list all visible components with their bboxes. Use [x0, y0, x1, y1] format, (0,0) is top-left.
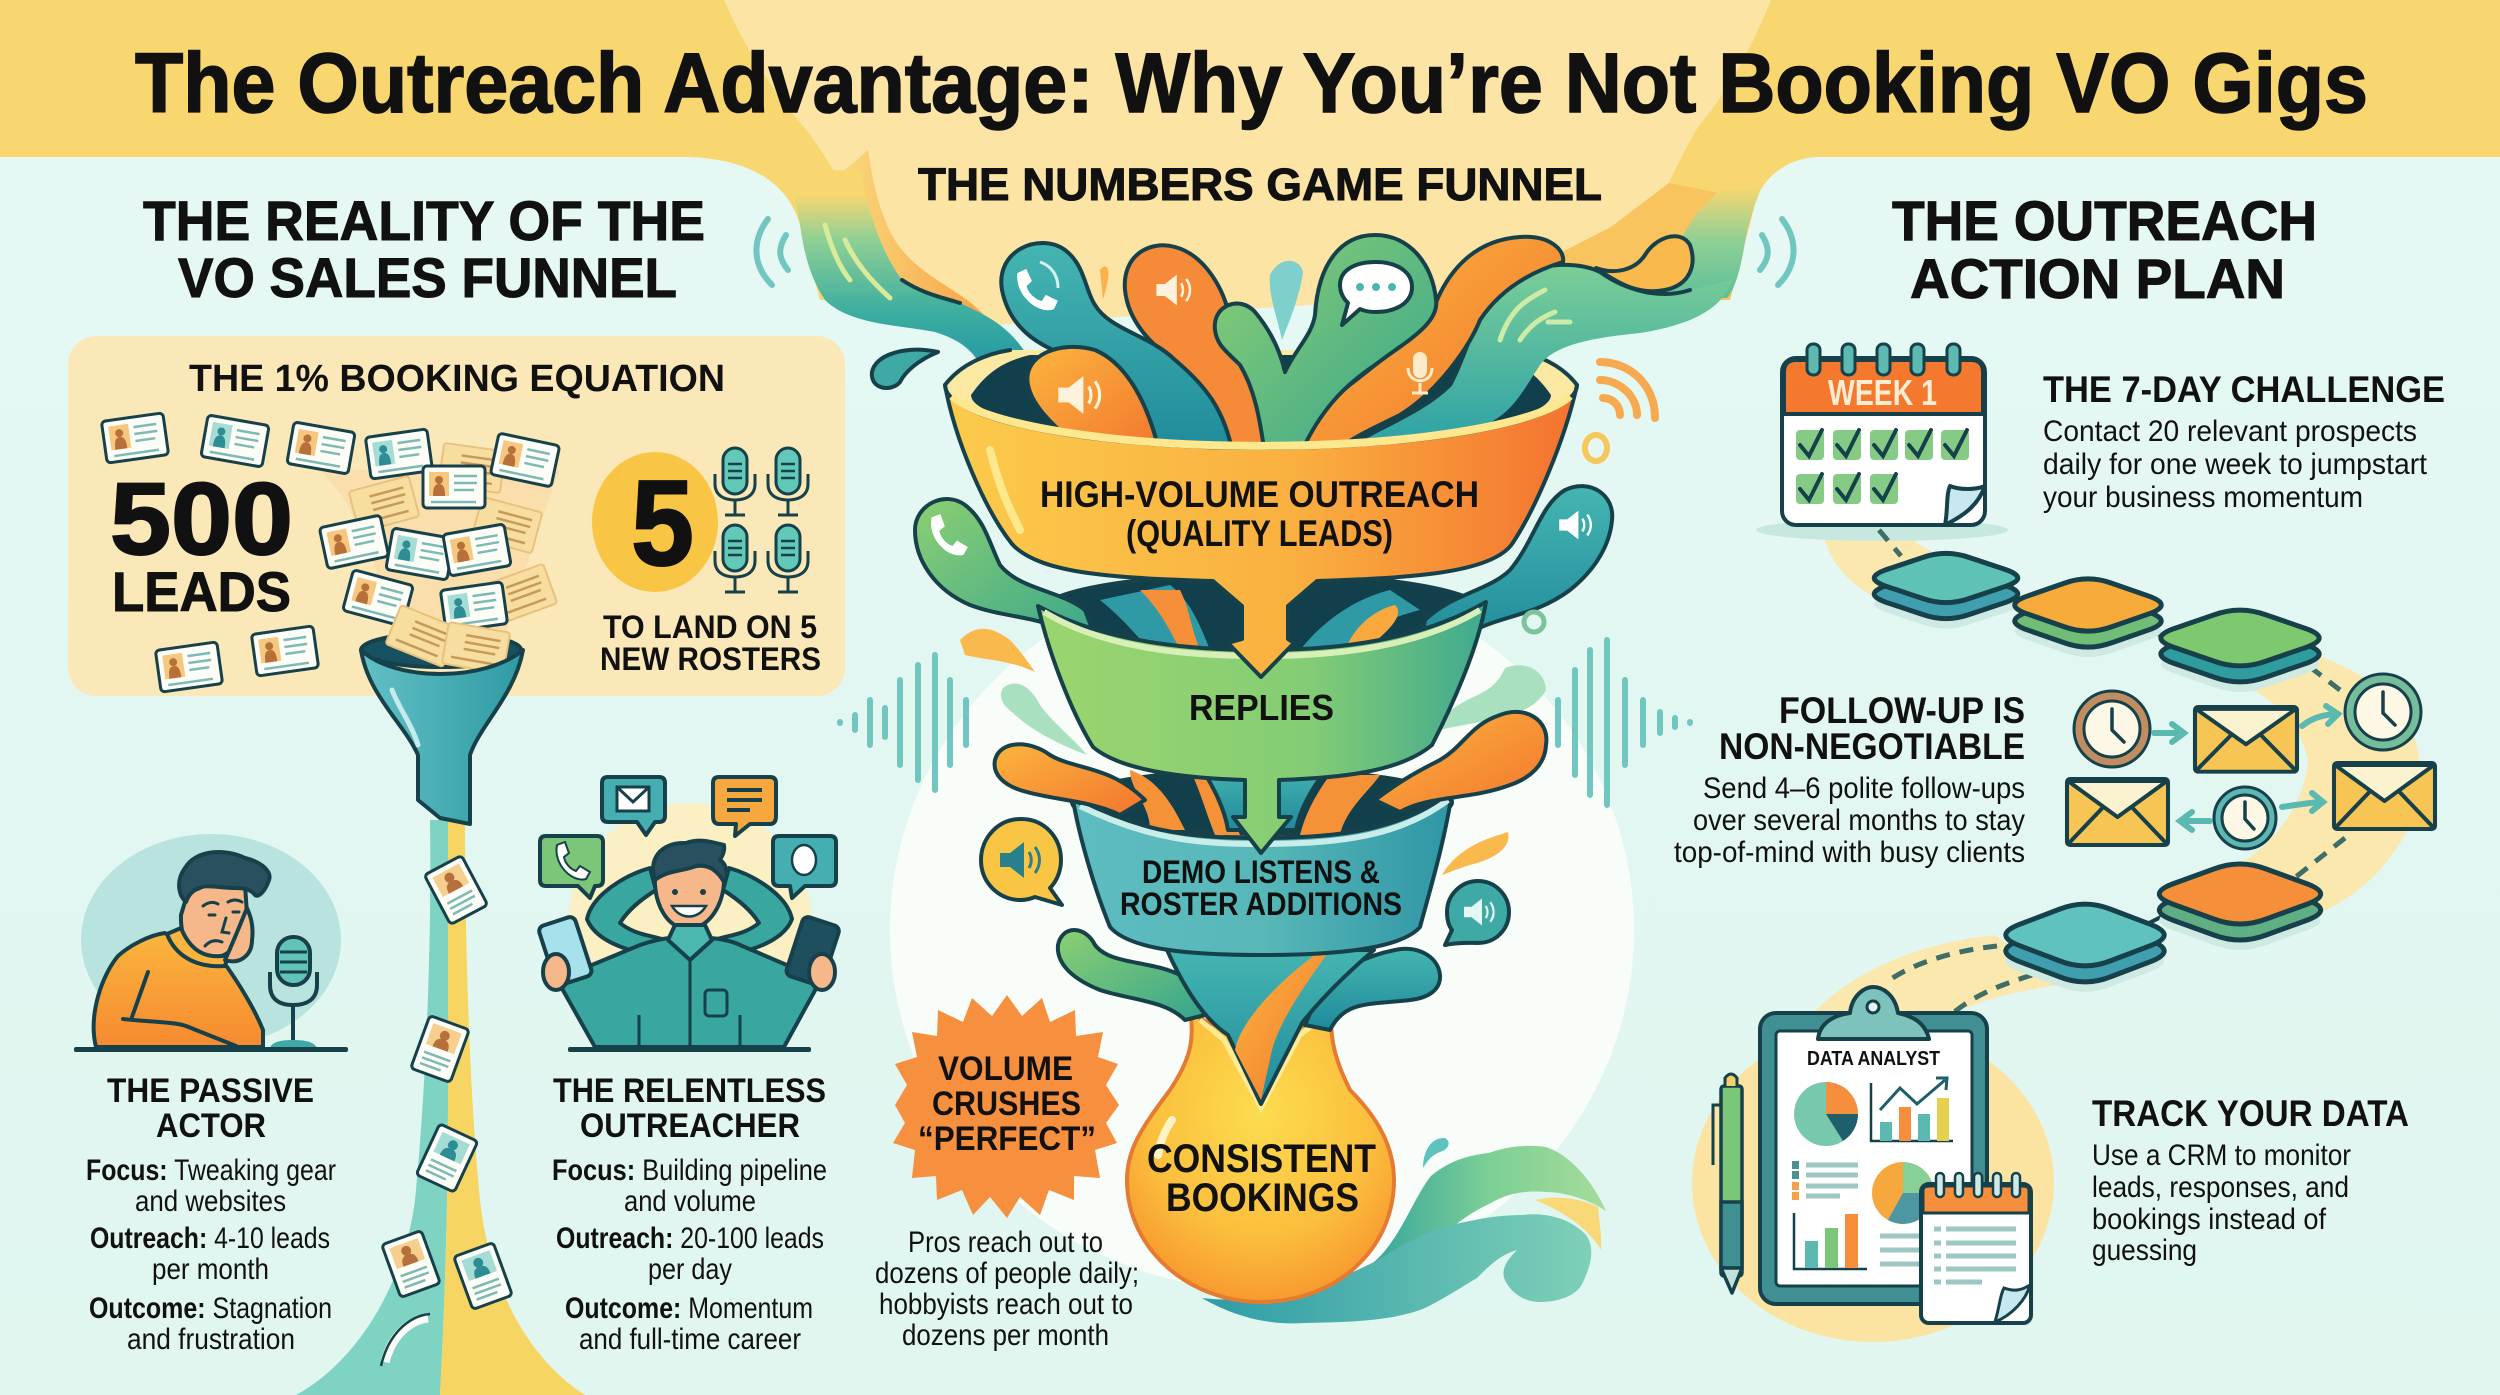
stat: 500 leads: LEADS: [112, 560, 291, 623]
cream pour area at top of funnel: [724, 0, 1771, 325]
text: follow-up is non-negotiable: Send 4–6 polite follow-ups: [1703, 772, 2025, 805]
label: high-volume outreach: [1040, 474, 1479, 554]
text: track your data: [2092, 1093, 2409, 1267]
heading: the outreach action plan: ACTION PLAN: [1910, 247, 2285, 310]
label: demo listens and roster additions: DEMO LISTENS &: [1142, 854, 1380, 890]
persona details: [86, 1154, 336, 1356]
stat: 5 with microphones: 5: [631, 455, 694, 591]
text: the 7-day challenge: daily for one week to jumpstart: [2043, 448, 2428, 481]
bar chart: [1794, 1213, 1920, 1269]
persona details: per day: [648, 1253, 732, 1286]
text: track your data: leads, responses, and: [2092, 1171, 2349, 1204]
heading: numbers game funnel: THE NUMBERS GAME FUNNEL: [918, 159, 1602, 210]
bar and line chart: [1871, 1078, 1953, 1141]
decoration: bubble left speaker: [981, 819, 1062, 905]
phones in hands: [538, 916, 840, 990]
burst label: “PERFECT”: [918, 1120, 1096, 1158]
stat: 500 leads: [110, 462, 293, 623]
green-teal wave on right: [1335, 265, 1732, 455]
persona details: and volume: [624, 1185, 756, 1218]
persona name: [553, 1072, 826, 1145]
decoration: top droplets: [872, 261, 1303, 388]
decoration: bubble right speaker: [1445, 881, 1509, 945]
follow-up clocks and envelopes: [2067, 674, 2435, 849]
persona: the passive actor: [74, 834, 348, 1356]
small teal funnel: [361, 605, 523, 824]
left column: reality of the funnel: [68, 189, 845, 1395]
splash: orange right stream with mic: [1298, 237, 1563, 455]
equation heading: THE 1% BOOKING EQUATION: [189, 358, 725, 400]
text: track your data: Use a CRM to monitor: [2092, 1139, 2351, 1172]
bottom swirl under bulb: [1202, 1138, 1606, 1323]
persona details: Outreach: 4-10 leads: [90, 1222, 330, 1255]
text: track your data: TRACK YOUR DATA: [2092, 1093, 2409, 1134]
heading: the outreach action plan: THE OUTREACH: [1892, 189, 2317, 252]
sound waves beside the funnel: [756, 219, 1794, 805]
persona details: [552, 1154, 827, 1356]
persona details: Outcome: Stagnation: [89, 1292, 332, 1325]
text: the 7-day challenge: [2043, 369, 2445, 514]
burst label: CRUSHES: [932, 1085, 1081, 1123]
text: the 7-day challenge: THE 7-DAY CHALLENGE: [2043, 369, 2445, 410]
persona details: and websites: [135, 1185, 286, 1218]
persona details: and full-time career: [579, 1323, 801, 1356]
persona name: THE RELENTLESS: [553, 1072, 826, 1110]
text: follow-up is non-negotiable: FOLLOW-UP IS: [1779, 690, 2025, 731]
caption: to land on 5 new rosters: [600, 609, 821, 677]
caption: to land on 5 new rosters: NEW ROSTERS: [600, 641, 821, 677]
persona name: OUTREACHER: [580, 1107, 800, 1145]
text: pros versus hobbyists: Pros reach out to: [908, 1226, 1103, 1259]
pie chart 2: [1872, 1162, 1934, 1224]
text: follow-up is non-negotiable: over several months to stay: [1693, 804, 2025, 837]
microphone icon: [270, 937, 317, 1048]
text: track your data: guessing: [2092, 1234, 2197, 1267]
stat: 5 with microphones: [592, 448, 808, 592]
splash: top right yellow blob: [1596, 236, 1693, 291]
pie chart 1: [1794, 1082, 1858, 1146]
illustration: tired actor at microphone: [74, 834, 348, 1052]
persona details: and frustration: [127, 1323, 295, 1356]
text: pros versus hobbyists: dozens per month: [902, 1319, 1109, 1352]
label: demo listens and roster additions: ROSTER ADDITIONS: [1120, 886, 1402, 922]
persona name: THE PASSIVE: [107, 1072, 314, 1110]
persona name: ACTOR: [156, 1107, 266, 1145]
right column: action plan: [1674, 189, 2445, 1342]
funnel stage 3: demo listens and roster additions: [1072, 770, 1452, 955]
persona details: per month: [152, 1253, 269, 1286]
splashes between funnel stages: [995, 712, 1546, 830]
splash with speaker icon: [1420, 486, 1612, 650]
label: replies: REPLIES: [1189, 687, 1334, 728]
text: pros versus hobbyists: dozens of people daily;: [875, 1257, 1139, 1290]
funnel stage 2: replies: [915, 486, 1612, 853]
top banner band: [0, 0, 2500, 300]
beam behind lead cards: [320, 470, 560, 650]
central white glow: [890, 570, 1634, 1290]
calendar icon: week 1: [1756, 344, 2008, 541]
heading: reality of the VO sales funnel: THE REALITY OF THE: [143, 189, 705, 252]
lead cards cloud: [101, 413, 560, 692]
clipboard: data analyst: DATA ANALYST: [1807, 1048, 1940, 1070]
bulb label: BOOKINGS: [1166, 1176, 1359, 1220]
text: follow-up is non-negotiable: [1674, 690, 2025, 869]
bulb label: CONSISTENT: [1147, 1137, 1376, 1181]
left side flow: orange and green: [790, 150, 1045, 420]
decoration: small splashes: [960, 612, 1544, 875]
text: pros versus hobbyists: hobbyists reach out to: [879, 1288, 1133, 1321]
stat: 500 leads: 500: [110, 462, 293, 576]
clipboard: data analyst: [1760, 987, 2031, 1323]
text: follow-up is non-negotiable: NON-NEGOTIABLE: [1719, 726, 2025, 767]
funnel stage 1: high-volume outreach: [945, 235, 1732, 677]
heading: reality of the VO sales funnel: VO SALES FUNNEL: [178, 246, 677, 309]
decoration: orange wifi arcs: [1585, 362, 1655, 461]
splash with phone icon: [1001, 243, 1233, 455]
splash with phone icon: [915, 499, 1100, 650]
heading: reality of the VO sales funnel: [143, 189, 705, 309]
persona details: Outcome: Momentum: [565, 1292, 813, 1325]
main title: The Outreach Advantage: Why You’re Not Booking VO Gigs: [135, 36, 2368, 130]
stream of leads falling from funnel: [296, 820, 585, 1395]
panel: 1% booking equation: [68, 336, 845, 696]
caption: to land on 5 new rosters: TO LAND ON 5: [603, 609, 817, 645]
light green splashes in the glow: [1001, 665, 1546, 755]
pen icon: [1713, 1074, 1742, 1293]
burst label: VOLUME: [938, 1050, 1073, 1088]
persona: the relentless outreacher: [538, 777, 840, 1356]
label: high-volume outreach: (QUALITY LEADS): [1126, 513, 1393, 554]
notepad: [1921, 1173, 2031, 1323]
splash with speaker icon, orange: [1125, 245, 1265, 455]
persona details: Focus: Building pipeline: [552, 1154, 827, 1187]
text: the 7-day challenge: Contact 20 relevant prospects: [2043, 415, 2417, 448]
splash with chat bubble: [1215, 235, 1436, 455]
right side flow: yellow and green: [1560, 157, 1780, 300]
text: the 7-day challenge: your business momentum: [2043, 481, 2363, 514]
bulb: consistent bookings: [1127, 1010, 1394, 1302]
legend list: [1806, 1165, 1858, 1196]
speech bubbles: [540, 777, 836, 898]
starburst: volume crushes perfect: [893, 995, 1119, 1218]
streams from demo funnel into bulb: [1058, 930, 1440, 1104]
splash with speaker icon, yellow: [1027, 347, 1160, 455]
calendar icon: week 1: WEEK 1: [1828, 372, 1937, 413]
text: follow-up is non-negotiable: top-of-mind with busy clients: [1674, 836, 2025, 869]
persona details: Outreach: 20-100 leads: [556, 1222, 824, 1255]
label: high-volume outreach: HIGH-VOLUME OUTREACH: [1040, 474, 1479, 515]
burst label: [918, 1050, 1096, 1158]
winding path band: [1692, 530, 2420, 1342]
path stepping stones: [1874, 530, 2345, 1013]
persona details: Focus: Tweaking gear: [86, 1154, 336, 1187]
label: demo listens and roster additions: [1120, 854, 1402, 922]
heading: the outreach action plan: [1892, 189, 2317, 310]
persona name: [107, 1072, 314, 1145]
bulb label: [1147, 1137, 1376, 1220]
text: pros versus hobbyists: [875, 1226, 1139, 1352]
text: track your data: bookings instead of: [2092, 1203, 2327, 1236]
illustration: busy outreacher with phones: [538, 777, 840, 1052]
